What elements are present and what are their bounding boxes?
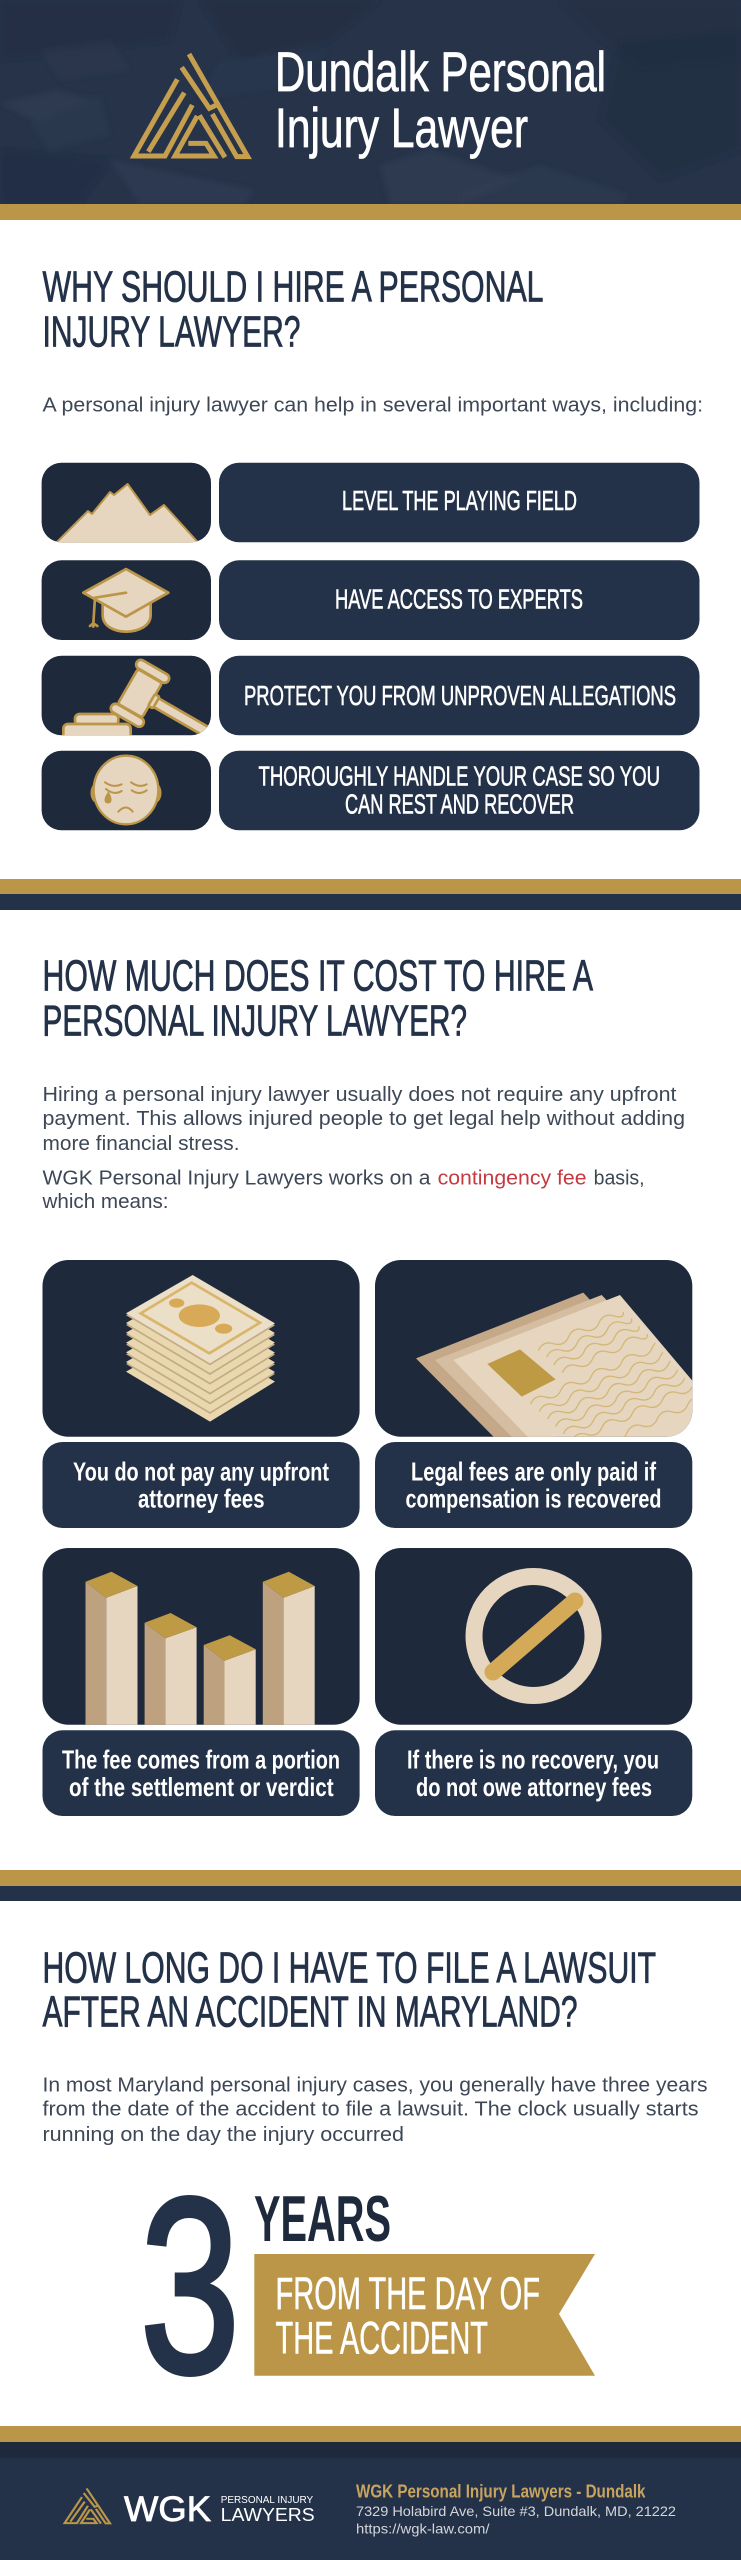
- panel: have access to experts: [42, 560, 700, 640]
- label: If there is no recovery, you: [407, 1744, 659, 1774]
- footer: [0, 2426, 741, 2560]
- panel: thoroughly handle your case: [42, 751, 700, 830]
- label: You do not pay any upfront: [73, 1457, 329, 1487]
- label: [258, 761, 660, 819]
- paragraph: statute of limitations: from the date of the accident to file a lawsuit. The clock usually starts: [42, 2099, 698, 2121]
- footer contact details: https://wgk-law.com/: [356, 2520, 490, 2536]
- label: CAN REST AND RECOVER: [345, 788, 574, 819]
- paragraph: cost explanation: payment. This allows injured people to get legal help without adding: [42, 1108, 685, 1130]
- icon: graduation cap: [83, 569, 168, 632]
- label: [407, 1744, 659, 1802]
- label: [406, 1457, 662, 1514]
- label: [73, 1457, 329, 1514]
- big number 3: 3: [140, 2146, 240, 2425]
- label: of the settlement or verdict: [69, 1772, 334, 1802]
- footer logo wordmark: [124, 2490, 315, 2529]
- paragraph: cost explanation: more financial stress.: [42, 1133, 240, 1155]
- word: years: YEARS: [254, 2182, 391, 2255]
- panel: no upfront fees: [42, 1260, 360, 1528]
- heading: cost: PERSONAL INJURY LAWYER?: [42, 997, 467, 1046]
- panel: fees only if recovered: [375, 1260, 720, 1528]
- title: Injury Lawyer: [275, 96, 528, 159]
- paragraph: contingency fee: [41, 1167, 645, 1213]
- icon: 3D bar chart: [86, 1572, 315, 1725]
- paragraph: contingency fee: contingency fee: [438, 1167, 587, 1189]
- paragraph: statute of limitations: running on the day the injury occurred: [42, 2124, 404, 2146]
- panel: fee from settlement: [42, 1548, 360, 1816]
- heading: how long: [42, 1943, 656, 2037]
- heading: why hire: [42, 262, 544, 356]
- ribbon banner: FROM THE DAY OF: [276, 2268, 540, 2319]
- icon: gavel: [62, 658, 208, 736]
- header banner: [0, 0, 741, 220]
- paragraph: cost explanation: [42, 1084, 685, 1155]
- label: [62, 1744, 340, 1802]
- ribbon banner: [254, 2254, 595, 2376]
- panel: no recovery no fees: [375, 1548, 692, 1816]
- title: Dundalk Personal: [275, 40, 606, 103]
- section divider: [0, 1870, 741, 1901]
- icon: stack of money: [126, 1275, 275, 1422]
- paragraph: contingency fee: which means:: [41, 1191, 168, 1213]
- panel: level the playing field: [42, 463, 700, 543]
- label: Legal fees are only paid if: [411, 1457, 656, 1487]
- icon: WGK logo: [134, 54, 248, 157]
- footer logo wordmark: WGK: [124, 2490, 211, 2529]
- label: LEVEL THE PLAYING FIELD: [342, 485, 577, 516]
- paragraph: contingency fee: basis,: [594, 1167, 645, 1189]
- paragraph: statute of limitations: [42, 2075, 708, 2146]
- icon: documents: [416, 1292, 692, 1437]
- section divider: [0, 879, 741, 910]
- gold band under header: [0, 204, 741, 220]
- ribbon banner: THE ACCIDENT: [276, 2312, 488, 2363]
- footer logo mark: [65, 2488, 110, 2524]
- paragraph: contingency fee: WGK Personal Injury Lawyers works on a: [42, 1167, 431, 1189]
- label: compensation is recovered: [406, 1484, 662, 1514]
- footer contact details: WGK Personal Injury Lawyers - Dundalk: [356, 2482, 646, 2502]
- label: HAVE ACCESS TO EXPERTS: [335, 583, 583, 614]
- icon: mountain: [56, 484, 198, 543]
- paragraph: statute of limitations: In most Maryland personal injury cases, you generally have three years: [42, 2075, 708, 2097]
- label: attorney fees: [138, 1484, 264, 1514]
- icon: prohibition sign: [474, 1576, 593, 1696]
- heading: why hire: INJURY LAWYER?: [42, 308, 300, 356]
- label: do not owe attorney fees: [416, 1772, 652, 1802]
- footer logo wordmark: LAWYERS: [221, 2505, 315, 2525]
- intro text: A personal injury lawyer can help in several important ways, including:: [42, 394, 703, 416]
- paragraph: cost explanation: Hiring a personal injury lawyer usually does not require any upfront: [42, 1084, 677, 1106]
- heading: cost: [42, 952, 593, 1046]
- panel: protect you: [42, 656, 700, 736]
- icon: sad face: [92, 756, 160, 824]
- label: The fee comes from a portion: [62, 1744, 340, 1774]
- title: [275, 40, 606, 159]
- footer contact details: 7329 Holabird Ave, Suite #3, Dundalk, MD, 21222: [356, 2503, 676, 2519]
- footer contact details: [356, 2482, 676, 2536]
- aerial photo background: [122, 168, 514, 201]
- footer logo wordmark: PERSONAL INJURY: [221, 2495, 314, 2506]
- callout: 3 years: [140, 2146, 595, 2425]
